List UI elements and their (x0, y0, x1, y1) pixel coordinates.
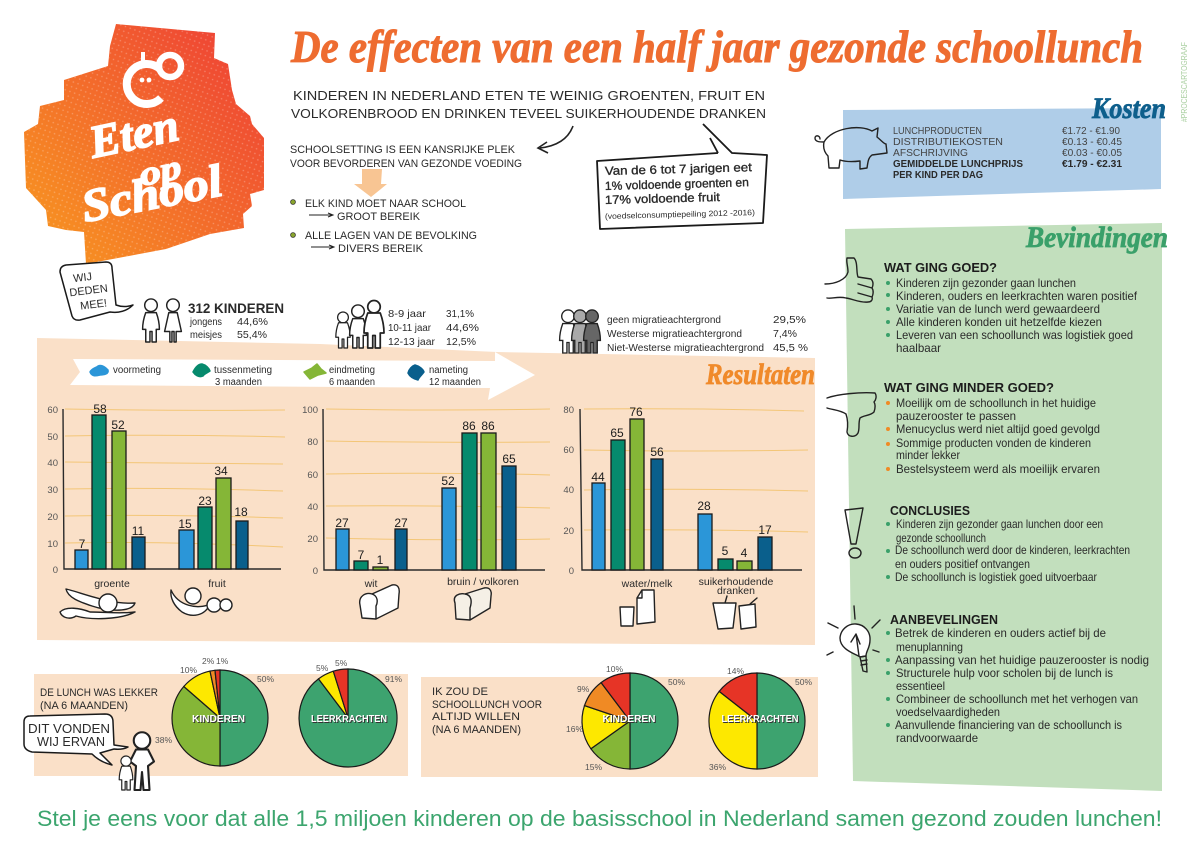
bar chart: groente en fruit: 23 (198, 494, 212, 508)
bar chart: wit en bruin brood: 60 (307, 470, 318, 481)
bar chart: wit en bruin brood: 86 (481, 419, 495, 433)
logo word School: School (77, 155, 227, 232)
pie chart: leerkrachten lekker: 5% (335, 658, 348, 668)
speech bubble: dit vonden wij ervan: DIT VONDEN (28, 721, 110, 736)
section: aanbevelingen (886, 612, 1149, 745)
bar chart: groente en fruit: 30 (47, 485, 58, 496)
pie chart: leerkrachten altijd: 50% (795, 677, 812, 687)
bevindingen heading: Bevindingen (1025, 221, 1168, 254)
bar chart: wit en bruin brood: 40 (307, 502, 318, 513)
speech bubble: wij deden mee: DEDEN (69, 283, 109, 299)
legend: tussenmeting: 3 maanden (215, 377, 262, 388)
bar chart: dranken: 40 (563, 485, 574, 496)
icon: three kids by age (336, 300, 384, 348)
legend: eindmeting: 6 maanden (329, 377, 375, 388)
demographics: leeftijd: 12-13 jaar (388, 336, 435, 348)
section: wat ging goed: Alle kinderen konden uit hetzelfde kiezen (896, 315, 1102, 329)
bar chart: wit en bruin brood: 27 (394, 516, 408, 530)
demographics: kinderen: 312 KINDEREN (188, 300, 284, 316)
pie chart: leerkrachten altijd (709, 666, 812, 772)
section: wat ging goed: Kinderen zijn gezonder gaan lunchen (896, 276, 1076, 290)
section: aanbevelingen: Aanpassing van het huidige pauzerooster is nodig (895, 653, 1149, 667)
demographics: migratie: 45,5 % (773, 343, 808, 354)
bar chart: groente en fruit: 18 (234, 505, 248, 519)
pie chart: kinderen lekker (155, 656, 274, 766)
kosten items: PER KIND PER DAG (893, 170, 983, 181)
logo symbol (127, 52, 181, 104)
speech bubble: dit vonden wij ervan (24, 714, 128, 765)
bar chart: dranken: 80 (563, 405, 574, 416)
panel: resultaten (37, 299, 815, 645)
pie chart: kinderen altijd: 9% (577, 684, 590, 694)
section: wat ging goed: WAT GING GOED? (884, 260, 997, 275)
pie chart: kinderen altijd: KINDEREN (602, 713, 656, 725)
bar chart: groente en fruit (47, 402, 285, 619)
icon: exclamation mark (845, 508, 863, 558)
section: wat ging minder goed (884, 380, 1100, 476)
bar chart: dranken: 44 (591, 470, 605, 484)
section: wat ging minder goed: Bestelsysteem werd als moeilijk ervaren (896, 462, 1100, 476)
bar chart: dranken: 4 (741, 546, 748, 560)
icon: juice cups (713, 596, 757, 629)
bar chart: groente en fruit: 10 (47, 539, 58, 550)
demographics: migratie: Niet-Westerse migratieachtergrond (607, 343, 764, 354)
bar chart: dranken: 28 (697, 499, 711, 513)
icon: migration group (560, 310, 600, 353)
icon: brown bread (454, 588, 491, 620)
pie chart: leerkrachten lekker: 91% (385, 674, 402, 684)
bar chart: dranken: 60 (563, 445, 574, 456)
pie chart: kinderen lekker: KINDEREN (193, 714, 246, 726)
section: conclusies: en ouders positief ontvangen (895, 557, 1030, 571)
pie chart: kinderen altijd: 16% (566, 724, 583, 734)
demographics: migratie (607, 315, 808, 354)
icon: vegetables (60, 589, 135, 619)
section: wat ging goed: Kinderen, ouders en leerkrachten waren positief (896, 289, 1138, 303)
bar chart: wit en bruin brood: 1 (377, 553, 384, 567)
section: conclusies: De schoollunch werd door de kinderen, leerkrachten (895, 543, 1130, 557)
icon: glass and milk carton (620, 590, 655, 626)
pie chart: kinderen altijd: 50% (668, 677, 685, 687)
demographics: kinderen (188, 300, 284, 341)
section: aanbevelingen: randvoorwaarde (896, 731, 978, 745)
section: wat ging minder goed: Menucyclus werd niet altijd goed gevolgd (896, 422, 1100, 436)
bar chart: groente en fruit: fruit (208, 578, 226, 590)
section: aanbevelingen: essentieel (896, 679, 945, 693)
icon: fruit (171, 588, 232, 615)
bar chart: wit en bruin brood: bruin / volkoren (447, 576, 519, 588)
kosten prices: €0.03 - €0.05 (1062, 148, 1122, 159)
text: ik zou de schoollunch: (NA 6 MAANDEN) (432, 724, 521, 736)
bar chart: dranken: water/melk (621, 578, 673, 590)
legend: tussenmeting: tussenmeting (214, 365, 272, 376)
section: wat ging goed (884, 260, 1138, 355)
demographics: migratie: 29,5% (773, 315, 806, 326)
kosten items (893, 126, 1023, 181)
demographics: kinderen: 44,6% (237, 316, 268, 328)
bar chart: wit en bruin brood: 86 (462, 419, 476, 433)
speech bubble: consumption: (voedselconsumptiepeiling 2012 -2016) (605, 208, 755, 221)
demographics: migratie: 7,4% (773, 329, 797, 340)
bar chart: dranken: 17 (758, 523, 772, 537)
credit: #PROCESCARTOGRAAF (1179, 42, 1189, 122)
bullet list: reach: ALLE LAGEN VAN DE BEVOLKING (305, 230, 477, 242)
speech bubble: consumption: 17% voldoende fruit (605, 190, 721, 207)
speech bubble: dit vonden wij ervan: WIJ ERVAN (37, 734, 105, 749)
bar chart: groente en fruit: 50 (47, 432, 58, 443)
icon: piggy bank (815, 128, 887, 169)
kosten prices: €1.72 - €1.90 (1062, 126, 1120, 137)
bar chart: groente en fruit: 7 (79, 537, 86, 551)
bar chart: wit en bruin brood: 7 (358, 548, 365, 562)
curved arrow (538, 126, 573, 153)
bar chart: wit en bruin brood: wit (364, 578, 377, 590)
legend: voormeting: voormeting (113, 365, 161, 376)
section: aanbevelingen: Structurele hulp voor scholen bij de lunch is (896, 666, 1113, 680)
bar chart: groente en fruit: 34 (214, 464, 228, 478)
kosten prices (1062, 126, 1122, 170)
pie chart: kinderen altijd: 15% (585, 762, 602, 772)
bar chart: wit en bruin brood: 100 (302, 405, 318, 416)
section: aanbevelingen: Betrek de kinderen en ouders actief bij de (895, 626, 1106, 640)
bar chart: wit en bruin brood: 65 (502, 452, 516, 466)
pie chart: kinderen altijd: 10% (606, 664, 623, 674)
legend: nameting (408, 365, 481, 388)
legend: nameting: nameting (429, 365, 468, 376)
speech bubble: consumption (597, 124, 767, 229)
pie chart: kinderen lekker: 10% (180, 665, 197, 675)
speech bubble: wij deden mee: WIJ (72, 271, 93, 285)
intro text: VOLKORENBROOD EN DRINKEN TEVEEL SUIKERHOUDENDE DRANKEN (291, 106, 766, 121)
bullet list: reach (291, 198, 477, 255)
bar chart: groente en fruit: 11 (132, 524, 145, 538)
bar chart: groente en fruit: 15 (178, 517, 192, 531)
pie chart: leerkrachten lekker: LEERKRACHTEN (312, 714, 388, 726)
bar chart: wit en bruin brood: 0 (313, 566, 318, 577)
section: conclusies: De schoollunch is logistiek goed uitvoerbaar (895, 570, 1097, 584)
section: aanbevelingen: voedselvaardigheden (896, 705, 1000, 719)
pie chart: leerkrachten altijd: 14% (727, 666, 744, 676)
closing statement: Stel je eens voor dat alle 1,5 miljoen kinderen op de basisschool in Nederland samen gezond zouden lunchen! (37, 806, 1162, 831)
demographics: kinderen: jongens (189, 316, 222, 328)
pie chart: leerkrachten lekker (299, 658, 402, 767)
bar chart: dranken: 76 (629, 405, 643, 419)
icon: white bread (360, 585, 399, 619)
demographics: leeftijd: 8-9 jaar (388, 308, 427, 320)
legend arrow (70, 352, 535, 400)
icon: light bulb (827, 606, 880, 672)
bar chart: dranken: 5 (722, 544, 729, 558)
bar chart: groente en fruit: 0 (53, 565, 58, 576)
pie chart: leerkrachten lekker: 5% (316, 663, 329, 673)
section: aanbevelingen: Aanvullende financiering van de schoollunch is (895, 718, 1122, 732)
bar chart: wit en bruin brood: 80 (307, 437, 318, 448)
demographics: migratie: Westerse migratieachtergrond (607, 329, 742, 340)
demographics: leeftijd: 12,5% (446, 336, 476, 348)
pie chart: leerkrachten altijd: LEERKRACHTEN (722, 714, 800, 726)
section: wat ging minder goed: Moeilijk om de schoollunch in het huidige (896, 396, 1096, 410)
pie chart: kinderen lekker: 38% (155, 735, 172, 745)
bar chart: groente en fruit: 40 (47, 458, 58, 469)
icon: kids boy and girl (143, 299, 181, 342)
demographics: migratie: geen migratieachtergrond (607, 315, 721, 326)
demographics: leeftijd: 44,6% (446, 322, 479, 334)
demographics: kinderen: 55,4% (237, 329, 267, 341)
bar chart: groente en fruit: 20 (47, 512, 58, 523)
text: de lunch was lekker: DE LUNCH WAS LEKKER (40, 687, 158, 699)
figures: parent and child (119, 732, 154, 790)
text: ik zou de schoollunch: IK ZOU DE (432, 686, 488, 698)
icon: thumb down (827, 393, 876, 436)
kosten items: LUNCHPRODUCTEN (893, 126, 982, 137)
speech bubble: wij deden mee: MEE! (80, 297, 108, 313)
legend: voormeting (90, 365, 161, 376)
text: ik zou de schoollunch: ALTIJD WILLEN (432, 711, 520, 723)
kosten prices: €0.13 - €0.45 (1062, 137, 1122, 148)
section: aanbevelingen: menuplanning (896, 640, 963, 654)
pie chart: kinderen lekker: 2% (202, 656, 215, 666)
bar chart: dranken: suikerhoudende (699, 576, 774, 588)
section: wat ging goed: haalbaar (896, 341, 941, 355)
bar chart: wit en bruin brood: 20 (307, 534, 318, 545)
demographics: leeftijd: 31,1% (446, 308, 474, 320)
bar chart: wit en bruin brood: 52 (441, 474, 455, 488)
demographics: kinderen: meisjes (190, 329, 222, 341)
speech bubble: consumption: 1% voldoende groenten en (605, 175, 749, 193)
section: wat ging minder goed: pauzerooster te passen (896, 409, 1016, 423)
text: ik zou de schoollunch (432, 686, 542, 736)
bar chart: groente en fruit: groente (94, 578, 130, 590)
legend: eindmeting (304, 364, 375, 388)
bar chart: dranken: 65 (610, 426, 624, 440)
section: aanbevelingen: Combineer de schoollunch met het verhogen van (896, 692, 1138, 706)
resultaten heading: Resultaten (705, 358, 815, 391)
text: ik zou de schoollunch: SCHOOLLUNCH VOOR (432, 699, 542, 711)
bar chart: dranken: 56 (650, 445, 664, 459)
pie chart: kinderen lekker: 1% (216, 656, 229, 666)
section: wat ging minder goed: minder lekker (896, 448, 960, 462)
intro text: KINDEREN IN NEDERLAND ETEN TE WEINIG GROENTEN, FRUIT EN (293, 88, 765, 103)
kosten items: GEMIDDELDE LUNCHPRIJS (893, 159, 1023, 170)
kosten items: AFSCHRIJVING (893, 148, 968, 159)
bullet list: reach: GROOT BEREIK (337, 211, 421, 223)
icon: thumb up (825, 258, 873, 302)
legend: eindmeting: eindmeting (329, 365, 375, 376)
bullet list: reach: ELK KIND MOET NAAR SCHOOL (305, 198, 466, 210)
bar chart: groente en fruit: 52 (111, 418, 125, 432)
panel: bevindingen (825, 221, 1168, 791)
bar chart: dranken: 0 (569, 566, 574, 577)
panel: de lunch was lekker (24, 656, 408, 790)
bullet list: reach: DIVERS BEREIK (338, 243, 424, 255)
bar chart: groente en fruit: 58 (93, 402, 107, 416)
section: wat ging goed: Leveren van een schoollunch was logistiek goed (896, 328, 1133, 342)
pie chart: leerkrachten altijd: 36% (709, 762, 726, 772)
pie chart: kinderen lekker: KINDEREN (192, 713, 245, 725)
demographics: leeftijd: 10-11 jaar (388, 322, 431, 334)
logo: Eten op School (24, 24, 264, 264)
speech bubble: wij deden mee (60, 262, 133, 320)
pie chart: kinderen altijd: KINDEREN (604, 714, 656, 726)
legend: tussenmeting (193, 364, 272, 388)
bar chart: groente en fruit: 60 (47, 405, 58, 416)
logo word op: op (136, 149, 185, 194)
bar chart: dranken (563, 405, 808, 629)
panel: schoollunch voor altijd (421, 664, 818, 777)
school setting text: SCHOOLSETTING IS EEN KANSRIJKE PLEK (290, 144, 516, 156)
section: conclusies: CONCLUSIES (890, 503, 970, 518)
section: aanbevelingen: AANBEVELINGEN (890, 612, 998, 627)
logo word Eten: Eten (83, 99, 183, 168)
text: de lunch was lekker (40, 687, 158, 712)
kosten items: DISTRIBUTIEKOSTEN (893, 137, 1003, 148)
kosten heading: Kosten (1091, 92, 1166, 125)
intro text (291, 88, 766, 121)
section: conclusies: Kinderen zijn gezonder gaan lunchen door een (896, 517, 1103, 531)
section: wat ging minder goed: Sommige producten vonden de kinderen (896, 436, 1091, 450)
speech bubble: consumption: Van de 6 tot 7 jarigen eet (605, 160, 753, 178)
pie chart: kinderen lekker: 50% (257, 674, 274, 684)
bar chart: dranken: 20 (563, 526, 574, 537)
kosten prices: €1.79 - €2.31 (1062, 159, 1122, 170)
section: wat ging minder goed: WAT GING MINDER GOED? (884, 380, 1054, 395)
section: conclusies (886, 503, 1130, 584)
school setting text (290, 144, 522, 170)
text: de lunch was lekker: (NA 6 MAANDEN) (40, 700, 128, 712)
bar chart: wit en bruin brood (302, 405, 550, 620)
demographics: leeftijd (388, 308, 479, 348)
pie chart: kinderen altijd (566, 664, 685, 772)
pie chart: leerkrachten altijd: LEERKRACHTEN (722, 713, 798, 725)
bar chart: dranken: dranken (717, 585, 755, 597)
bar chart: wit en bruin brood: 27 (335, 516, 349, 530)
school setting text: VOOR BEVORDEREN VAN GEZONDE VOEDING (290, 158, 522, 170)
panel: kosten (815, 92, 1166, 199)
peach down arrow (354, 169, 387, 197)
legend: nameting: 12 maanden (429, 377, 481, 388)
section: conclusies: gezonde schoollunch (896, 531, 986, 545)
section: wat ging goed: Variatie van de lunch werd gewaardeerd (896, 302, 1100, 316)
pie chart: leerkrachten lekker: LEERKRACHTEN (311, 713, 387, 725)
